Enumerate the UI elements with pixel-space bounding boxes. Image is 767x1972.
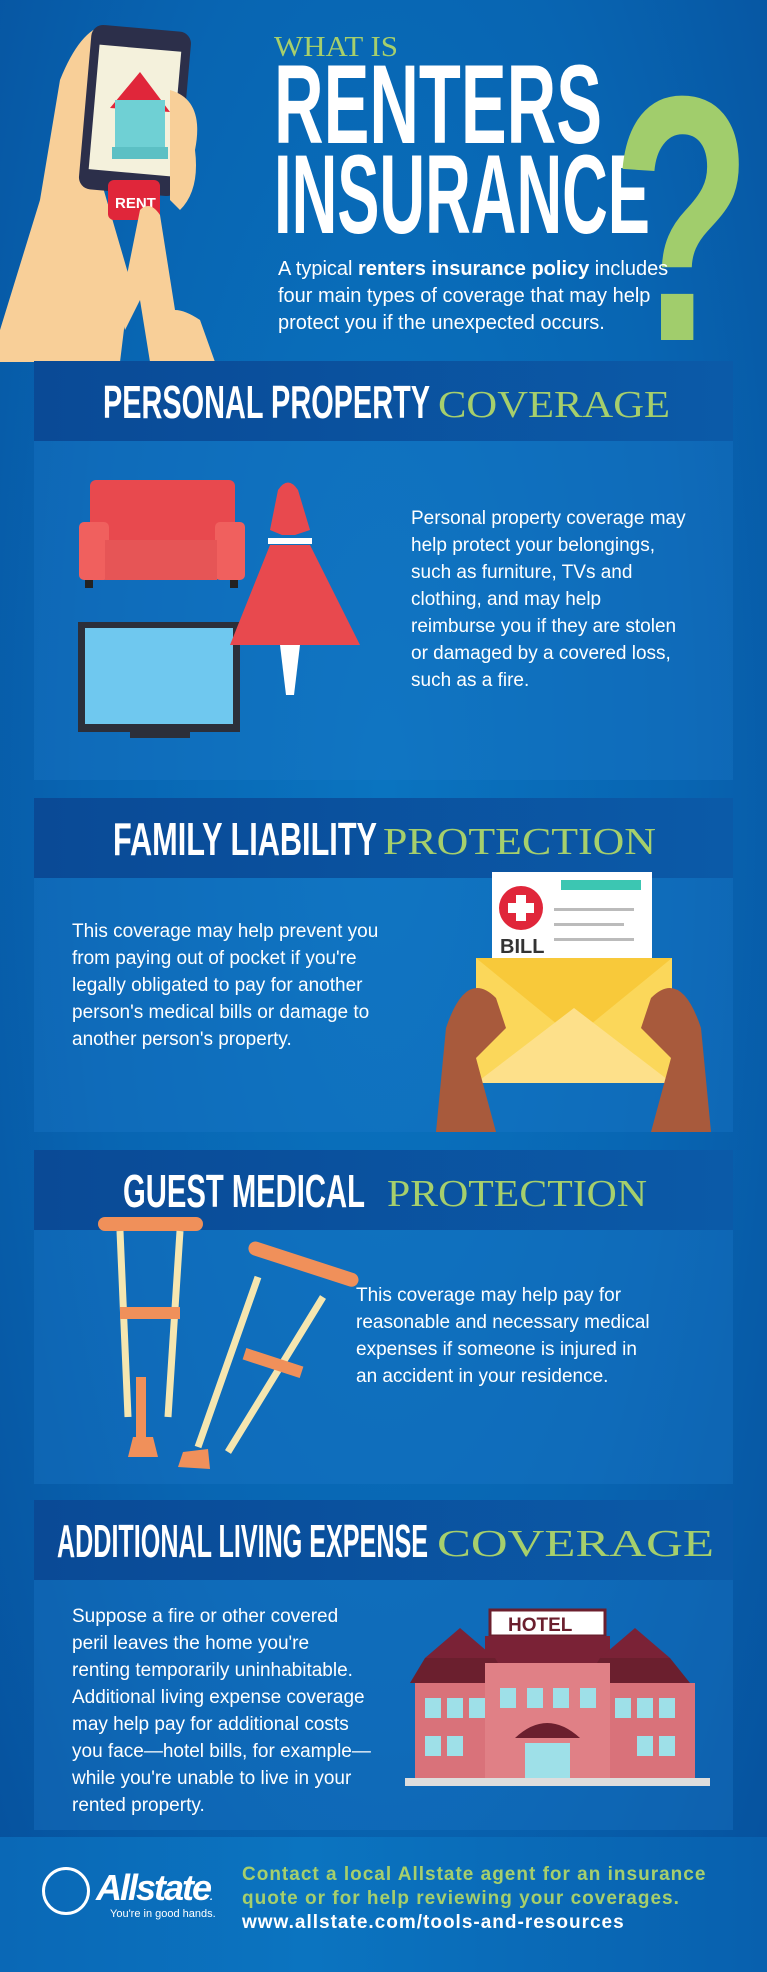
heading: guest medical protection: GUEST MEDICAL bbox=[123, 1165, 365, 1217]
panel: guest medical bbox=[34, 1150, 733, 1484]
heading: additional living expense coverage: ADDITIONAL LIVING EXPENSE bbox=[57, 1515, 428, 1567]
text: family liability: This coverage may help prevent you bbox=[72, 921, 378, 942]
illustration: hand holding phone bbox=[0, 25, 215, 362]
title: WHAT IS bbox=[274, 32, 398, 63]
text: additional living expense bbox=[72, 1606, 371, 1816]
footer text bbox=[242, 1864, 706, 1933]
text: personal property bbox=[411, 508, 686, 691]
text: family liability bbox=[72, 921, 378, 1050]
heading: personal property coverage: PERSONAL PROPERTY bbox=[103, 376, 430, 428]
logo: allstate bbox=[42, 1867, 216, 1920]
footer text: quote or for help reviewing your coverages. bbox=[242, 1888, 680, 1909]
text: guest medical: an accident in your residence. bbox=[356, 1366, 608, 1387]
text: family liability: person's medical bills or damage to bbox=[72, 1002, 369, 1023]
text: personal property: or damaged by a covered loss, bbox=[411, 643, 671, 664]
text: family liability: another person's property. bbox=[72, 1029, 292, 1050]
text: personal property: such as a fire. bbox=[411, 670, 529, 691]
logo: allstate: You're in good hands. bbox=[110, 1908, 216, 1920]
intro text bbox=[278, 258, 668, 334]
panel: additional living expense bbox=[34, 1500, 733, 1830]
heading: additional living expense coverage: COVERAGE bbox=[437, 1523, 714, 1565]
text: guest medical: expenses if someone is injured in bbox=[356, 1339, 637, 1360]
text: personal property: Personal property coverage may bbox=[411, 508, 686, 529]
text: personal property: such as furniture, TVs and bbox=[411, 562, 632, 583]
intro text: protect you if the unexpected occurs. bbox=[278, 312, 605, 334]
illustration: crutches bbox=[98, 1217, 358, 1469]
footer text: www.allstate.com/tools-and-resources bbox=[242, 1912, 625, 1933]
text: family liability: legally obligated to pay for another bbox=[72, 975, 362, 996]
text: additional living expense: Suppose a fire or other covered bbox=[72, 1606, 338, 1627]
heading: additional living expense coverage bbox=[34, 1500, 733, 1580]
footer text: Contact a local Allstate agent for an insurance bbox=[242, 1864, 706, 1885]
text: personal property: reimburse you if they are stolen bbox=[411, 616, 676, 637]
heading: guest medical protection: PROTECTION bbox=[387, 1173, 647, 1215]
illustration: hotel: HOTEL bbox=[508, 1615, 573, 1636]
heading: personal property coverage bbox=[34, 361, 733, 441]
text: guest medical: reasonable and necessary medical bbox=[356, 1312, 650, 1333]
illustration: bill envelope bbox=[436, 872, 711, 1132]
intro text: four main types of coverage that may help bbox=[278, 285, 650, 307]
intro text: A typical renters insurance policy includes bbox=[278, 258, 668, 280]
text: additional living expense: rented property. bbox=[72, 1795, 205, 1816]
footer band bbox=[0, 1837, 767, 1972]
text: additional living expense: while you're unable to live in your bbox=[72, 1768, 351, 1789]
illustration: sofa tv dress bbox=[78, 480, 360, 738]
heading: family liability protection bbox=[34, 798, 733, 878]
text: guest medical: This coverage may help pay for bbox=[356, 1285, 621, 1306]
panel: personal property bbox=[34, 361, 733, 780]
text: guest medical bbox=[356, 1285, 650, 1387]
text: additional living expense: may help pay for additional costs bbox=[72, 1714, 349, 1735]
text: personal property: help protect your belongings, bbox=[411, 535, 655, 556]
text: additional living expense: renting temporarily uninhabitable. bbox=[72, 1660, 353, 1681]
illustration: bill envelope: BILL bbox=[500, 936, 544, 958]
text: family liability: from paying out of pocket if you're bbox=[72, 948, 357, 969]
text: personal property: clothing, and may help bbox=[411, 589, 601, 610]
illustration: hotel bbox=[405, 1608, 710, 1786]
heading: family liability protection: FAMILY LIABILITY bbox=[113, 813, 377, 865]
heading: personal property coverage: COVERAGE bbox=[438, 384, 670, 426]
panel: family liability bbox=[34, 798, 733, 1132]
text: additional living expense: peril leaves the home you're bbox=[72, 1633, 309, 1654]
logo: allstate: Allstate. bbox=[96, 1867, 211, 1908]
text: additional living expense: you face—hotel bills, for example— bbox=[72, 1741, 371, 1762]
title bbox=[274, 24, 752, 360]
text: additional living expense: Additional living expense coverage bbox=[72, 1687, 365, 1708]
illustration: hand holding phone: RENT bbox=[115, 195, 156, 212]
heading: guest medical protection bbox=[34, 1150, 733, 1230]
heading: family liability protection: PROTECTION bbox=[383, 821, 656, 863]
